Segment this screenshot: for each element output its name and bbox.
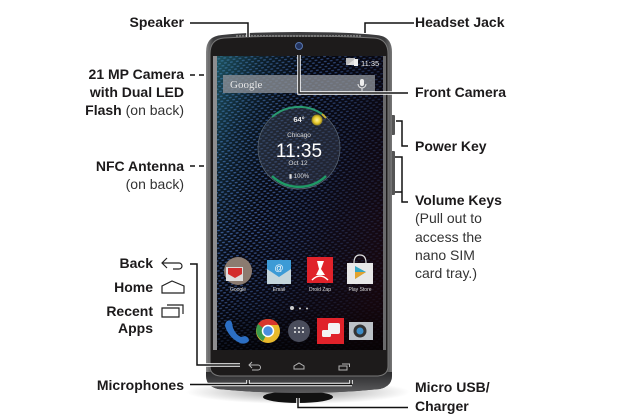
line: volume keys bbox=[395, 157, 408, 202]
label: camera line 2: with Dual LED bbox=[89, 84, 184, 100]
icon: home bbox=[162, 281, 184, 293]
label: camera line 3: Flash (on back) bbox=[85, 102, 184, 118]
label: Charger: Charger bbox=[415, 398, 469, 414]
drop shadow bbox=[186, 380, 410, 404]
line: micro USB bbox=[298, 398, 408, 408]
icon: Play Store: Play Store bbox=[348, 287, 372, 293]
google search bar: Google bbox=[230, 79, 262, 91]
clock widget: Chicago bbox=[287, 132, 311, 139]
clock widget: Oct 12 bbox=[288, 160, 308, 167]
line: front camera bbox=[299, 55, 408, 93]
note: SIM tray: card tray.) bbox=[415, 265, 477, 281]
front camera lens bbox=[296, 42, 302, 50]
pedestal bbox=[263, 391, 333, 403]
icon: nav recent bbox=[339, 364, 350, 370]
app icons row bbox=[224, 255, 373, 293]
label: Headset Jack: Headset Jack bbox=[415, 14, 505, 30]
icon: Google folder: Google bbox=[230, 287, 246, 293]
icon: recent bbox=[162, 305, 183, 317]
icon: Droid Zap bbox=[307, 257, 333, 293]
icon: apps bbox=[288, 320, 310, 342]
label: Speaker: Speaker bbox=[130, 14, 185, 30]
note: SIM tray: (Pull out to bbox=[415, 210, 482, 226]
line: power key bbox=[396, 121, 408, 146]
nav icons bbox=[249, 362, 350, 370]
label: Micro USB: Micro USB/ bbox=[415, 379, 490, 395]
line: microphones bbox=[190, 380, 352, 384]
icon: camera bbox=[349, 322, 373, 340]
line: headset jack bbox=[365, 23, 414, 33]
speaker grille bbox=[236, 35, 362, 37]
page indicator dots bbox=[290, 306, 308, 310]
icon: nav back bbox=[249, 362, 260, 370]
clock widget: 64° bbox=[293, 115, 305, 124]
status bar bbox=[346, 58, 379, 68]
label: Front Camera: Front Camera bbox=[415, 84, 506, 100]
icon: Google folder bbox=[224, 257, 252, 293]
label: Apps: Apps bbox=[118, 320, 153, 336]
icon: Email: Email bbox=[273, 287, 285, 293]
icon: phone bbox=[225, 320, 249, 344]
note: SIM tray: nano SIM bbox=[415, 247, 475, 263]
icon: chrome bbox=[256, 319, 280, 343]
label: camera: 21 MP Camera bbox=[89, 66, 184, 82]
right labels bbox=[415, 14, 506, 414]
line: camera dashed bbox=[190, 74, 206, 76]
callout lines bbox=[190, 23, 414, 408]
bezel bbox=[210, 36, 388, 376]
phone bbox=[186, 32, 410, 404]
label: NFC: NFC Antenna bbox=[96, 158, 184, 174]
label: Power Key: Power Key bbox=[415, 138, 487, 154]
left labels bbox=[85, 14, 185, 393]
line: NFC dashed bbox=[190, 165, 206, 167]
status bar: 11:35 bbox=[361, 59, 379, 68]
icon: nav home bbox=[294, 363, 304, 369]
note: SIM tray bbox=[415, 210, 482, 281]
line: speaker bbox=[190, 23, 248, 37]
icon: Email: @ bbox=[274, 263, 284, 273]
line: back bbox=[190, 264, 240, 365]
icon: Droid Zap: Droid Zap bbox=[309, 287, 331, 293]
label: Recent: Recent bbox=[106, 303, 153, 319]
label: NFC note: (on back) bbox=[126, 176, 184, 192]
label: Microphones: Microphones bbox=[97, 377, 184, 393]
note: SIM tray: access the bbox=[415, 229, 482, 245]
icon: back arrow bbox=[162, 258, 182, 269]
label: Volume Keys: Volume Keys bbox=[415, 192, 502, 208]
google search bar bbox=[223, 75, 375, 93]
clock widget: ▮ 100% bbox=[289, 174, 310, 180]
legend icons bbox=[162, 258, 184, 317]
label: Home: Home bbox=[114, 279, 153, 295]
clock widget bbox=[258, 107, 340, 189]
phone body bbox=[206, 32, 392, 393]
clock widget: 11:35 bbox=[276, 141, 322, 162]
side buttons bbox=[391, 115, 395, 135]
label: Back: Back bbox=[120, 255, 153, 271]
icon: messages bbox=[317, 318, 344, 344]
screen wallpaper bbox=[217, 56, 383, 350]
icon: Email bbox=[267, 260, 291, 293]
icon: Play Store bbox=[347, 255, 373, 293]
dock icons bbox=[225, 318, 373, 344]
